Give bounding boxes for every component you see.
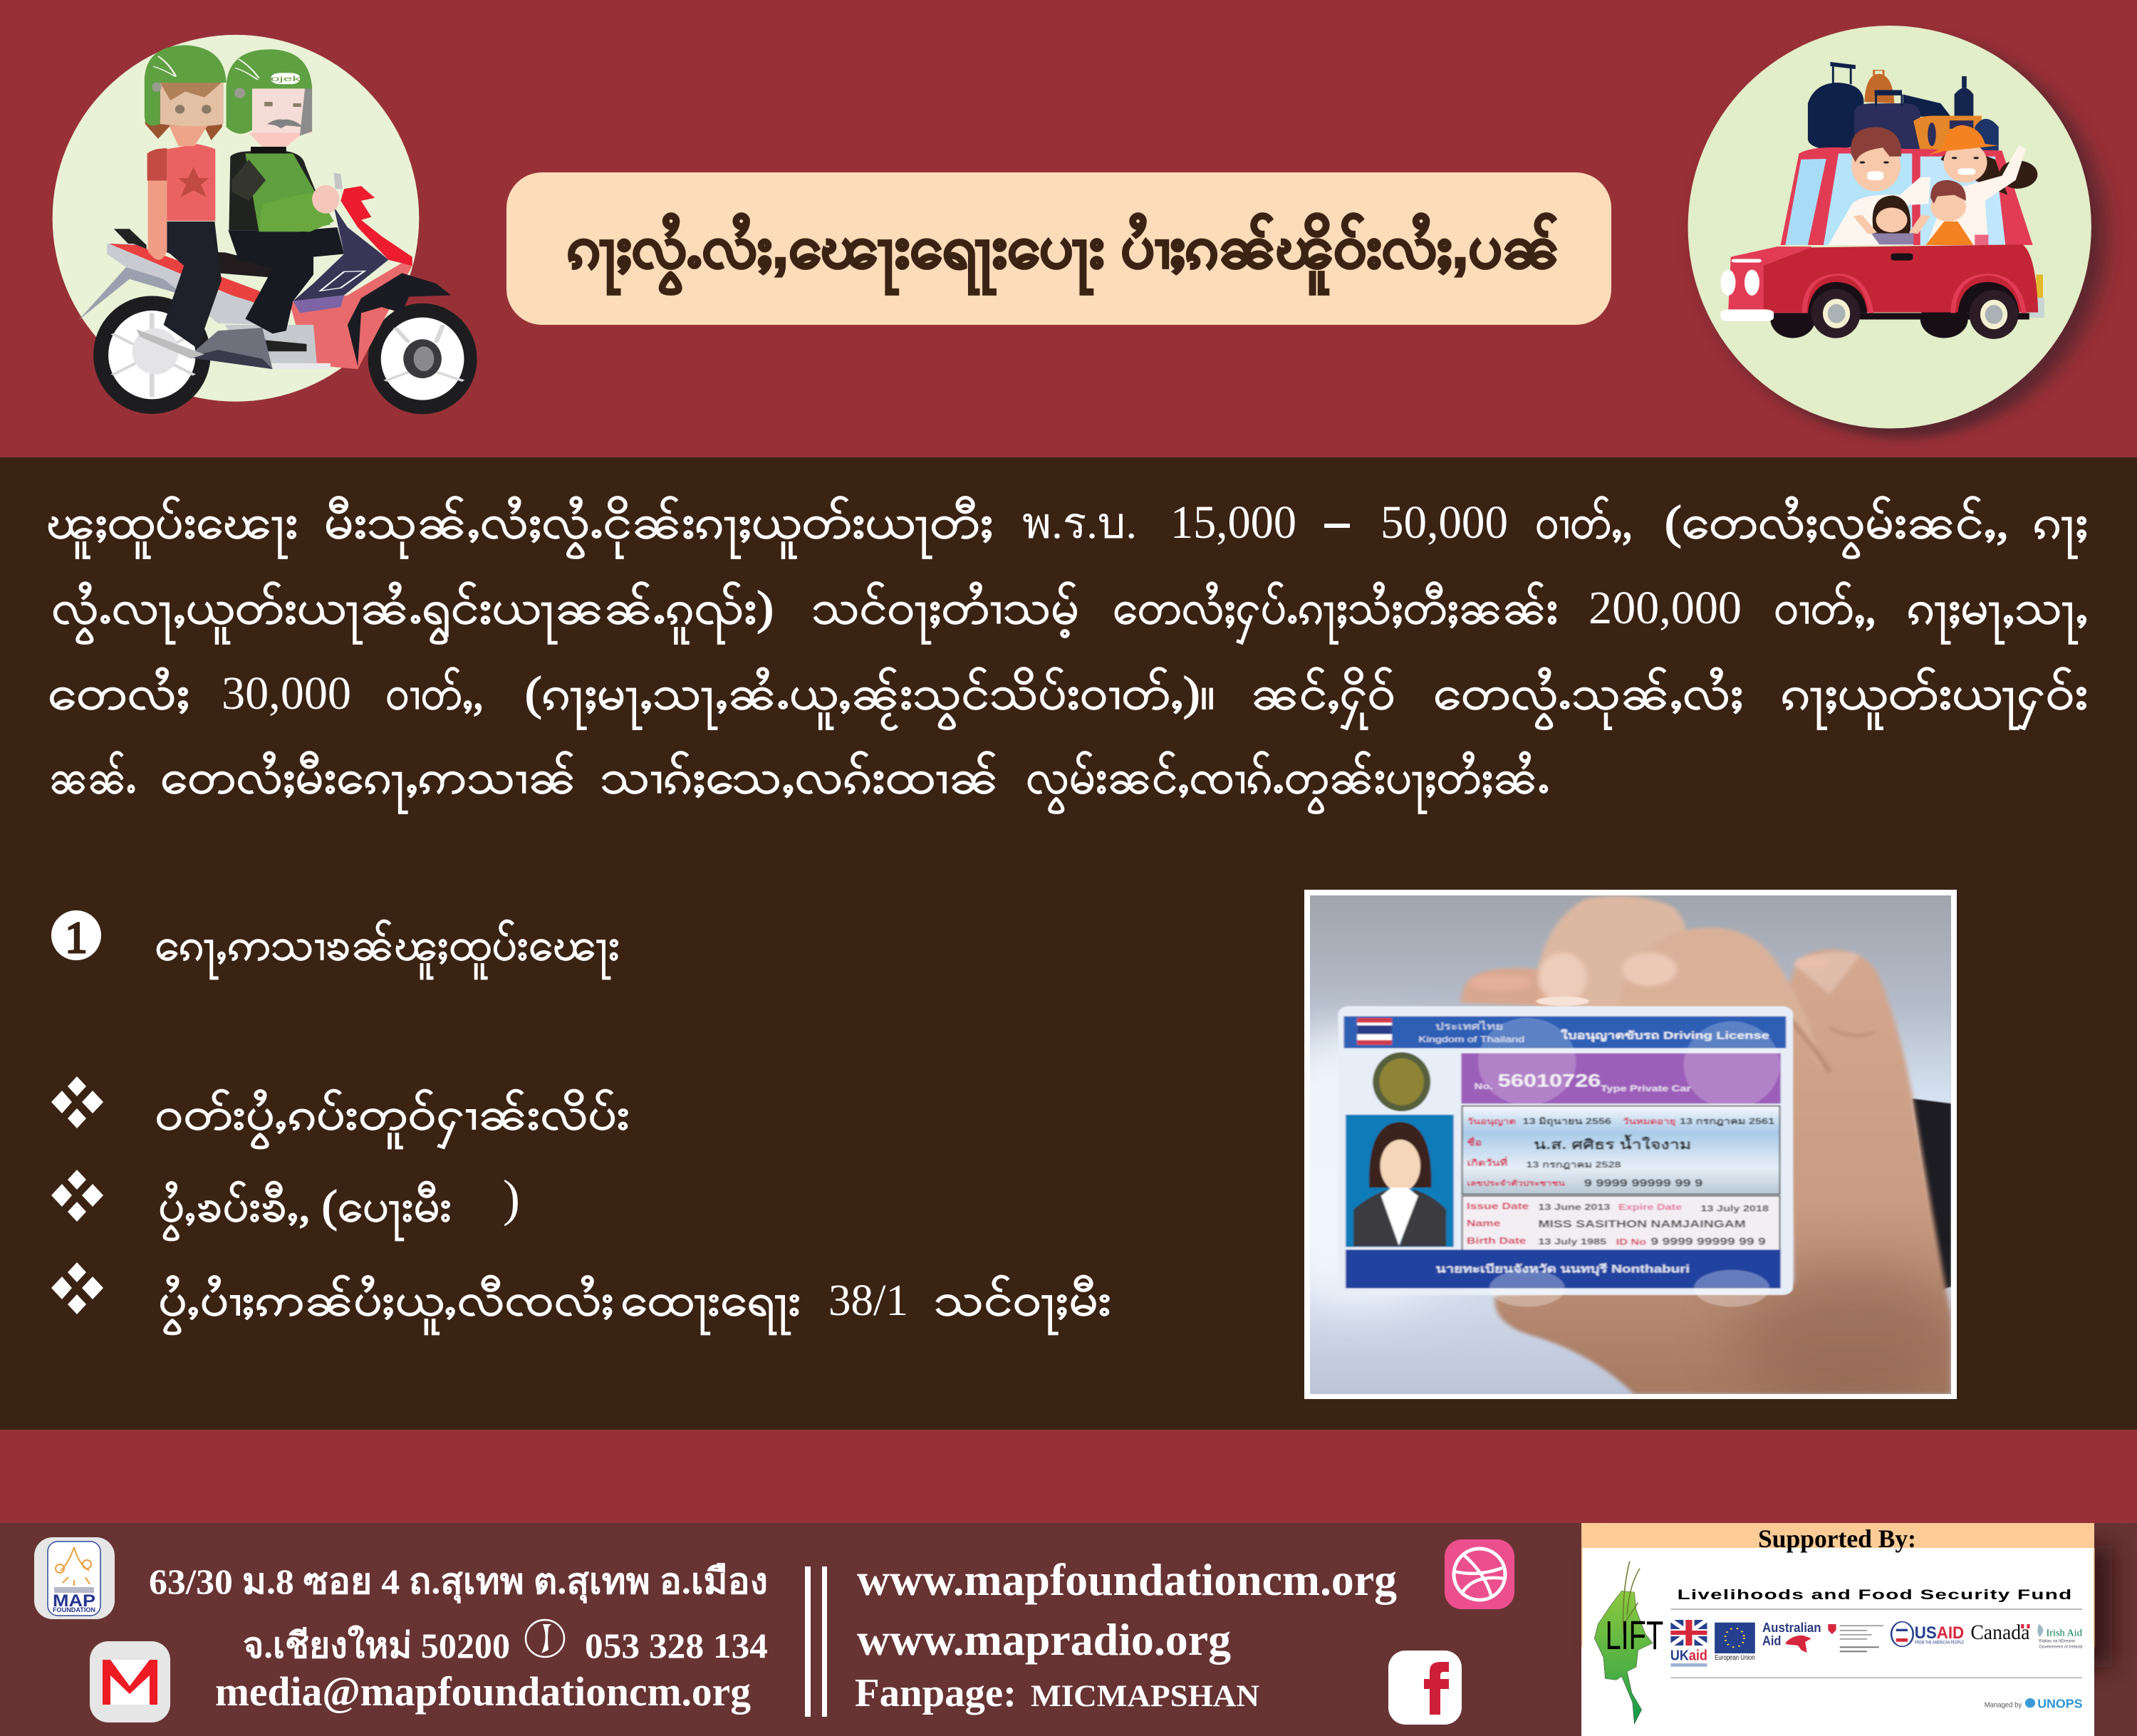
license card: Type Private Car [1601, 1084, 1691, 1093]
line 3: ၵႃႈယူတ်းယႃႁဝ်း [1781, 667, 2088, 730]
line 1: ၽူႈထူပ်းၽေႃး [46, 496, 298, 558]
list item 2: ) [503, 1170, 520, 1227]
panel: supporters [1581, 1523, 2112, 1736]
supporter logos: LIFT [1606, 1613, 1663, 1658]
photo: hand holding driving license [1234, 890, 1967, 1411]
icon: number 1 badge: 1 [66, 914, 87, 962]
boy [1925, 222, 1973, 245]
license card: 13 July 2018 [1700, 1204, 1769, 1214]
line 2: ၵႃႈမႃႇသႃႇ [1907, 582, 2088, 644]
address text: 053 328 134 [585, 1626, 768, 1665]
line 2: 200,000 [1589, 582, 1742, 634]
license card: ประเทศไทย [1435, 1021, 1503, 1032]
license card: 13 กรกฎาคม 2528 [1527, 1160, 1621, 1170]
title pill [506, 172, 1611, 325]
license card: ชื่อ [1467, 1136, 1482, 1148]
passenger [164, 222, 222, 348]
mom [2000, 160, 2037, 189]
seat [164, 251, 279, 278]
license card: No. [1475, 1082, 1493, 1091]
list item 1: ဝတ်းပွႆႇၵပ်းတူဝ်ႁၢၼ်းလိပ်း [155, 1089, 630, 1149]
list item 3: 38/1 [828, 1277, 908, 1325]
engine [225, 325, 317, 363]
line 2: တေလႆႈႁပ်ႉၵႃႈသႆႈတီႈၼၼ်း [1113, 581, 1558, 645]
USAID [1891, 1622, 1964, 1646]
websites text: MICMAPSHAN [1031, 1680, 1259, 1713]
Irish Aid: Government of Ireland [2039, 1644, 2082, 1649]
license card: Name [1467, 1218, 1501, 1229]
line 4 [49, 751, 1549, 814]
car body [2036, 274, 2043, 298]
title text: ၵႃႈလွႆႉလႆႈ,ၽေႃးရေႃးပေႃး ပၢႆႈၵၼ်ၽိူဝ်းလႆႈ,ပၼ် [567, 212, 1559, 295]
requirements list [51, 1076, 1111, 1334]
license card: 9 9999 99999 99 9 [1650, 1235, 1766, 1247]
tail [114, 229, 147, 251]
hand [1461, 896, 1951, 1394]
line 3: တေလႆႈ [48, 667, 189, 719]
fund name: Livelihoods and Food Security Fund [1678, 1587, 2071, 1603]
list item 3: ထေႃးရေႃး [620, 1277, 801, 1334]
Australian Aid: Australian [1762, 1621, 1821, 1636]
icon: dribbble [1445, 1539, 1514, 1609]
line 1: 50,000 [1381, 497, 1508, 549]
license card: ใบอนุญาตขับรถ Driving License [1561, 1029, 1769, 1042]
car cabin [1781, 147, 2033, 245]
illustration: motorcycle riders in circle: ojek [271, 75, 301, 83]
line 3: 30,000 [222, 667, 351, 719]
USAID: USAID [1915, 1623, 1964, 1642]
license card [1338, 1007, 1793, 1306]
Irish Aid [2037, 1624, 2082, 1649]
EU: European Union [1715, 1653, 1755, 1661]
line 2: ဝၢတ်ႇ, [1774, 581, 1876, 634]
license card: Birth Date [1467, 1236, 1527, 1246]
front fender [348, 273, 451, 366]
line 3 [48, 667, 2088, 730]
license card: ID No [1616, 1237, 1646, 1247]
list item 3: သင်ဝႃႈမီး [934, 1275, 1111, 1334]
driver [228, 227, 344, 333]
Canada: Canada [1970, 1621, 2029, 1644]
line 3: ဝၢတ်ႇ, [385, 667, 484, 719]
UNOPS: Managed by [1985, 1700, 2022, 1709]
line 3: (ၵႃႈမႃႇသႃႇၼႆႉယူႇၼႂ်းသွင်သိပ်းဝၢတ်ႇ)။ [525, 667, 1215, 730]
line 1: (တေလႆႈလွမ်းၼင်ႇ, [1665, 496, 2009, 558]
line 1: พ.ร.บ. [1022, 500, 1137, 547]
line 2: သင်ဝႃႈတၢႆသမ့် [811, 581, 1079, 644]
line 1: 15,000 [1170, 497, 1296, 549]
supporters heading: Supported By: [1758, 1524, 1916, 1553]
license card: เลขประจำตัวประชาชน [1467, 1179, 1566, 1187]
line 3: တေလွႆႉသုၼ်ႇလႆႈ [1433, 667, 1743, 729]
line 4: ၼၼ်ႉ [49, 751, 136, 804]
EU [1715, 1623, 1755, 1661]
license card: MISS SASITHON NAMJAINGAM [1538, 1218, 1746, 1230]
license card: เกิดวันที่ [1467, 1156, 1507, 1168]
list item 1 [51, 1076, 630, 1149]
line 3: ၼင်ႇႁိုဝ် [1251, 667, 1395, 730]
license card: วันหมดอายุ [1623, 1117, 1675, 1126]
line 1: ဝၢတ်ႇ, [1535, 496, 1633, 549]
websites text: www.mapfoundationcm.org [857, 1555, 1397, 1605]
line 2: လွႆႉလႃႇယူတ်းယႃၼႆႉရွင်းယႃၼၼ်ႉၵူၺ်း) [51, 581, 774, 644]
line 2 [51, 581, 2088, 645]
header band [0, 0, 2137, 457]
line 1: ၵႃႈ [2033, 497, 2088, 558]
Irish Aid: Irish Aid [2046, 1628, 2082, 1638]
girl [1873, 195, 1910, 233]
license card: 13 June 2013 [1538, 1202, 1610, 1212]
UK aid [1670, 1620, 1707, 1667]
list item 3: ပွႆႇပၢႆႈဢၼ်ပႆႈယူႇလီၸလႆႈ [158, 1275, 614, 1334]
front wheel [368, 303, 477, 415]
luggage [1830, 62, 1856, 69]
Swiss [1828, 1624, 1883, 1652]
Australian Aid: Aid [1762, 1633, 1782, 1648]
logo: MAP Foundation [34, 1537, 115, 1619]
line 1 [46, 496, 2088, 558]
icon: phone [526, 1620, 564, 1657]
logo: MAP Foundation: MAP [53, 1591, 95, 1611]
LIFT map logo [1594, 1561, 1663, 1724]
license card: วันอนุญาต [1467, 1117, 1516, 1126]
list item 3 [51, 1262, 1111, 1334]
license card: น.ส. ศศิธร น้ำใจงาม [1534, 1134, 1691, 1152]
icon: gmail [90, 1641, 170, 1722]
icon: facebook [1388, 1651, 1462, 1725]
address text [149, 1561, 768, 1715]
main brown panel [0, 457, 2137, 1430]
double divider [805, 1566, 827, 1717]
body paragraph [46, 496, 2088, 814]
line 4: သၢၵ်ႈသေႇလၵ်းထၢၼ် [600, 751, 999, 804]
address text: จ.เชียงใหม่ 50200 [243, 1625, 510, 1665]
logo: MAP Foundation: FOUNDATION [53, 1606, 95, 1613]
red spacer band [0, 1430, 2137, 1523]
license card: 13 มิถุนายน 2556 [1523, 1116, 1611, 1126]
heading text: ၵေႃႇဢသၢၶၼ်ၽူႈထူပ်းၽေႃး [155, 920, 620, 979]
USAID: FROM THE AMERICAN PEOPLE [1915, 1640, 1964, 1645]
illustration: motorcycle riders in circle [53, 35, 477, 415]
license card: Expire Date [1618, 1202, 1682, 1212]
line 1: မီးသုၼ်ႇလႆႈလွႆႉငိုၼ်းၵႃႈယူတ်းယႃတီႈ [324, 496, 993, 558]
list item 2 [51, 1170, 520, 1240]
list item 2: ပွႆႇၶပ်းၶီႇ, (ပေႃးမီး [158, 1181, 452, 1240]
license card: นายทะเบียนจังหวัด นนทบุรี Nonthaburi [1436, 1262, 1690, 1276]
license card: Kingdom of Thailand [1418, 1035, 1524, 1044]
rear wheel [93, 296, 211, 414]
Australian Aid [1762, 1621, 1821, 1653]
line 4: တေလႆႈမီးၵေႃႇဢသၢၼ် [160, 751, 576, 814]
license card: 56010726 [1498, 1071, 1601, 1091]
line 4: လွမ်းၼင်ႇၸၢၵ်ႉတွၼ်းပႃႈတႆႈၼႆႉ [1026, 751, 1549, 814]
supporter logos [1594, 1561, 2083, 1724]
fairing [290, 257, 412, 369]
address text: 63/30 ม.8 ซอย 4 ถ.สุเทพ ต.สุเทพ อ.เมือง [149, 1561, 768, 1604]
license card: Issue Date [1467, 1202, 1529, 1212]
wheels [1811, 289, 1861, 338]
license card: 13 กรกฎาคม 2561 [1680, 1117, 1774, 1126]
license card: 13 July 1985 [1538, 1237, 1606, 1247]
UNOPS: UNOPS [2037, 1697, 2083, 1710]
license card: 9 9999 99999 99 9 [1584, 1177, 1702, 1189]
UNOPS [1985, 1697, 2083, 1710]
UK aid: UKaid [1670, 1647, 1707, 1663]
Canada [1970, 1621, 2029, 1644]
icon: number 1 badge [51, 910, 101, 962]
footer band [0, 1523, 2137, 1736]
address text: media@mapfoundationcm.org [215, 1668, 751, 1715]
websites text: www.mapradio.org [857, 1615, 1231, 1665]
Irish Aid: Rialtas na hÉireann [2039, 1638, 2075, 1643]
illustration: family in red car in circle [1688, 26, 2106, 439]
dad [1829, 177, 1930, 245]
websites text [855, 1555, 1397, 1715]
websites text: Fanpage: [855, 1671, 1016, 1715]
numbered heading [51, 910, 620, 979]
